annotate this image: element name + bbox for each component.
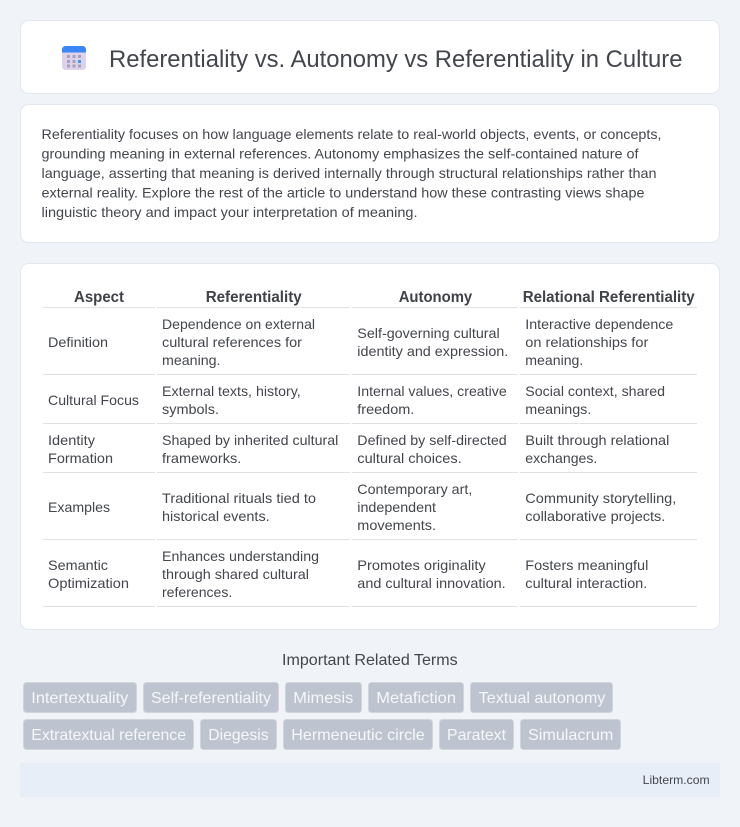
intro panel	[20, 104, 720, 242]
tag: Paratext	[440, 720, 514, 750]
table header row: Relational Referentiality	[523, 289, 695, 306]
row: Identity Formation: exchanges.	[525, 450, 597, 466]
row: Cultural Focus: External texts, history,	[162, 383, 301, 399]
header panel	[20, 20, 720, 94]
comparison table panel	[20, 264, 720, 630]
row: Definition: Dependence on external	[162, 316, 315, 332]
row: Semantic Optimization: Optimization	[48, 575, 129, 591]
row: Examples: independent	[357, 499, 436, 515]
tag: Simulacrum: Simulacrum	[528, 727, 613, 744]
tag: Self-referentiality: Self-referentiality	[151, 690, 271, 707]
row: Identity Formation: Defined by self-directed	[357, 432, 507, 448]
row: Definition: cultural references for	[162, 334, 302, 350]
row: Semantic Optimization: Promotes originality	[357, 557, 486, 573]
row: Identity Formation: Identity	[48, 432, 95, 448]
row: Semantic Optimization: Fosters meaningful	[525, 557, 648, 573]
tag: Metafiction	[368, 682, 464, 712]
tag: Intertextuality	[24, 682, 136, 712]
row: Definition: meaning.	[162, 352, 220, 368]
table header row: Aspect	[74, 289, 125, 306]
row: Cultural Focus: Social context, shared	[525, 383, 665, 399]
intro text: external reality. Explore the rest of the article to understand how these contrasting views shape	[42, 184, 645, 200]
tag: Metafiction: Metafiction	[376, 690, 456, 707]
intro text: Referentiality focuses on how language elements relate to real-world objects, events, or concepts,	[42, 126, 662, 142]
intro text: grounding meaning in external references. Autonomy emphasizes the self-contained nature of	[42, 146, 639, 162]
row: Semantic Optimization: cultural interaction.	[525, 575, 647, 591]
row: Identity Formation: Built through relational	[525, 432, 669, 448]
tag: Simulacrum	[520, 720, 620, 750]
row: Examples: historical events.	[162, 508, 270, 524]
row: Definition: Interactive dependence	[525, 316, 674, 332]
tag: Textual autonomy: Textual autonomy	[479, 690, 605, 707]
row: Definition: Definition	[48, 334, 108, 350]
row: Examples: Community storytelling,	[525, 490, 676, 506]
row: Semantic Optimization: Enhances understanding	[162, 548, 319, 564]
row: Semantic Optimization: through shared cultural	[162, 566, 309, 582]
row: Identity Formation	[43, 432, 697, 473]
tag: Hermeneutic circle	[284, 720, 432, 750]
tag: Diegesis: Diegesis	[208, 727, 269, 744]
row: Definition: on relationships for	[525, 334, 649, 350]
row: Identity Formation: Formation	[48, 450, 113, 466]
row: Semantic Optimization	[43, 548, 697, 607]
table header row	[43, 289, 697, 308]
row: Cultural Focus: meanings.	[525, 401, 591, 417]
row: Examples	[43, 481, 697, 540]
intro text: language, asserting that meaning is derived internally through structural relationships rather than	[42, 165, 656, 181]
tag: Textual autonomy	[470, 682, 612, 712]
tag: Mimesis: Mimesis	[293, 690, 353, 707]
intro text: linguistic theory and impact your interpretation of meaning.	[42, 204, 418, 220]
tag: Mimesis	[286, 682, 362, 712]
table header row: Referentiality	[206, 289, 302, 306]
row: Examples: Traditional rituals tied to	[162, 490, 316, 506]
tag: Extratextual reference: Extratextual reference	[31, 727, 186, 744]
row: Identity Formation: Shaped by inherited cultural	[162, 432, 338, 448]
tag: Paratext: Paratext	[447, 727, 507, 744]
row: Cultural Focus: symbols.	[162, 401, 219, 417]
footer bar	[20, 763, 720, 797]
row: Identity Formation: frameworks.	[162, 450, 241, 466]
row: Examples: Contemporary art,	[357, 481, 472, 497]
row: Semantic Optimization: references.	[162, 584, 232, 600]
tag: Hermeneutic circle: Hermeneutic circle	[291, 727, 425, 744]
row: Cultural Focus: Internal values, creative	[357, 383, 507, 399]
row: Examples: collaborative projects.	[525, 508, 665, 524]
row: Definition	[43, 316, 697, 375]
tag: Extratextual reference	[24, 720, 194, 750]
related terms tags	[24, 682, 620, 750]
row: Identity Formation: cultural choices.	[357, 450, 462, 466]
tag: Self-referentiality	[144, 682, 278, 712]
row: Semantic Optimization: Semantic	[48, 557, 108, 573]
related terms heading: Important Related Terms	[282, 652, 458, 669]
icon: calendar	[62, 46, 86, 70]
table header row: Autonomy	[399, 289, 472, 306]
row: Semantic Optimization: and cultural innovation.	[357, 575, 506, 591]
tag: Intertextuality: Intertextuality	[31, 690, 128, 707]
row: Examples: Examples	[48, 499, 110, 515]
row: Definition: Self-governing cultural	[357, 325, 500, 341]
footer source text: Libterm.com	[643, 773, 710, 787]
row: Cultural Focus	[43, 383, 697, 424]
row: Cultural Focus: freedom.	[357, 401, 414, 417]
row: Definition: identity and expression.	[357, 343, 508, 359]
tag: Diegesis	[200, 720, 276, 750]
intro text	[42, 126, 662, 220]
row: Examples: movements.	[357, 517, 436, 533]
row: Definition: meaning.	[525, 352, 583, 368]
row: Cultural Focus: Cultural Focus	[48, 392, 139, 408]
title: Referentiality vs. Autonomy vs Referentiality in Culture	[109, 46, 682, 73]
